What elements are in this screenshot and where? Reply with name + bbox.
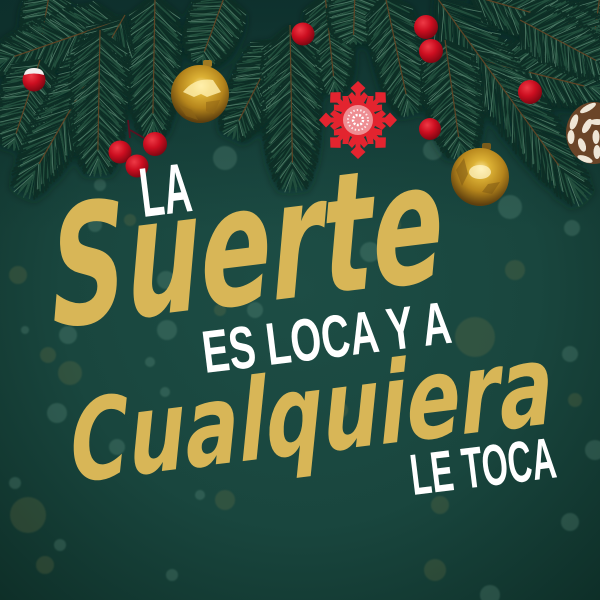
ornament: gold bauble right bbox=[451, 143, 509, 206]
berries bbox=[108, 15, 542, 178]
snow-capped berry bbox=[22, 68, 46, 92]
pine cone bbox=[566, 101, 600, 165]
text: LA: LA bbox=[135, 148, 195, 232]
snowflake ornament bbox=[319, 81, 397, 159]
text: ES LOCA Y A: ES LOCA Y A bbox=[198, 289, 455, 386]
pine branches bbox=[0, 0, 600, 219]
ornament: gold bauble left bbox=[171, 60, 229, 123]
